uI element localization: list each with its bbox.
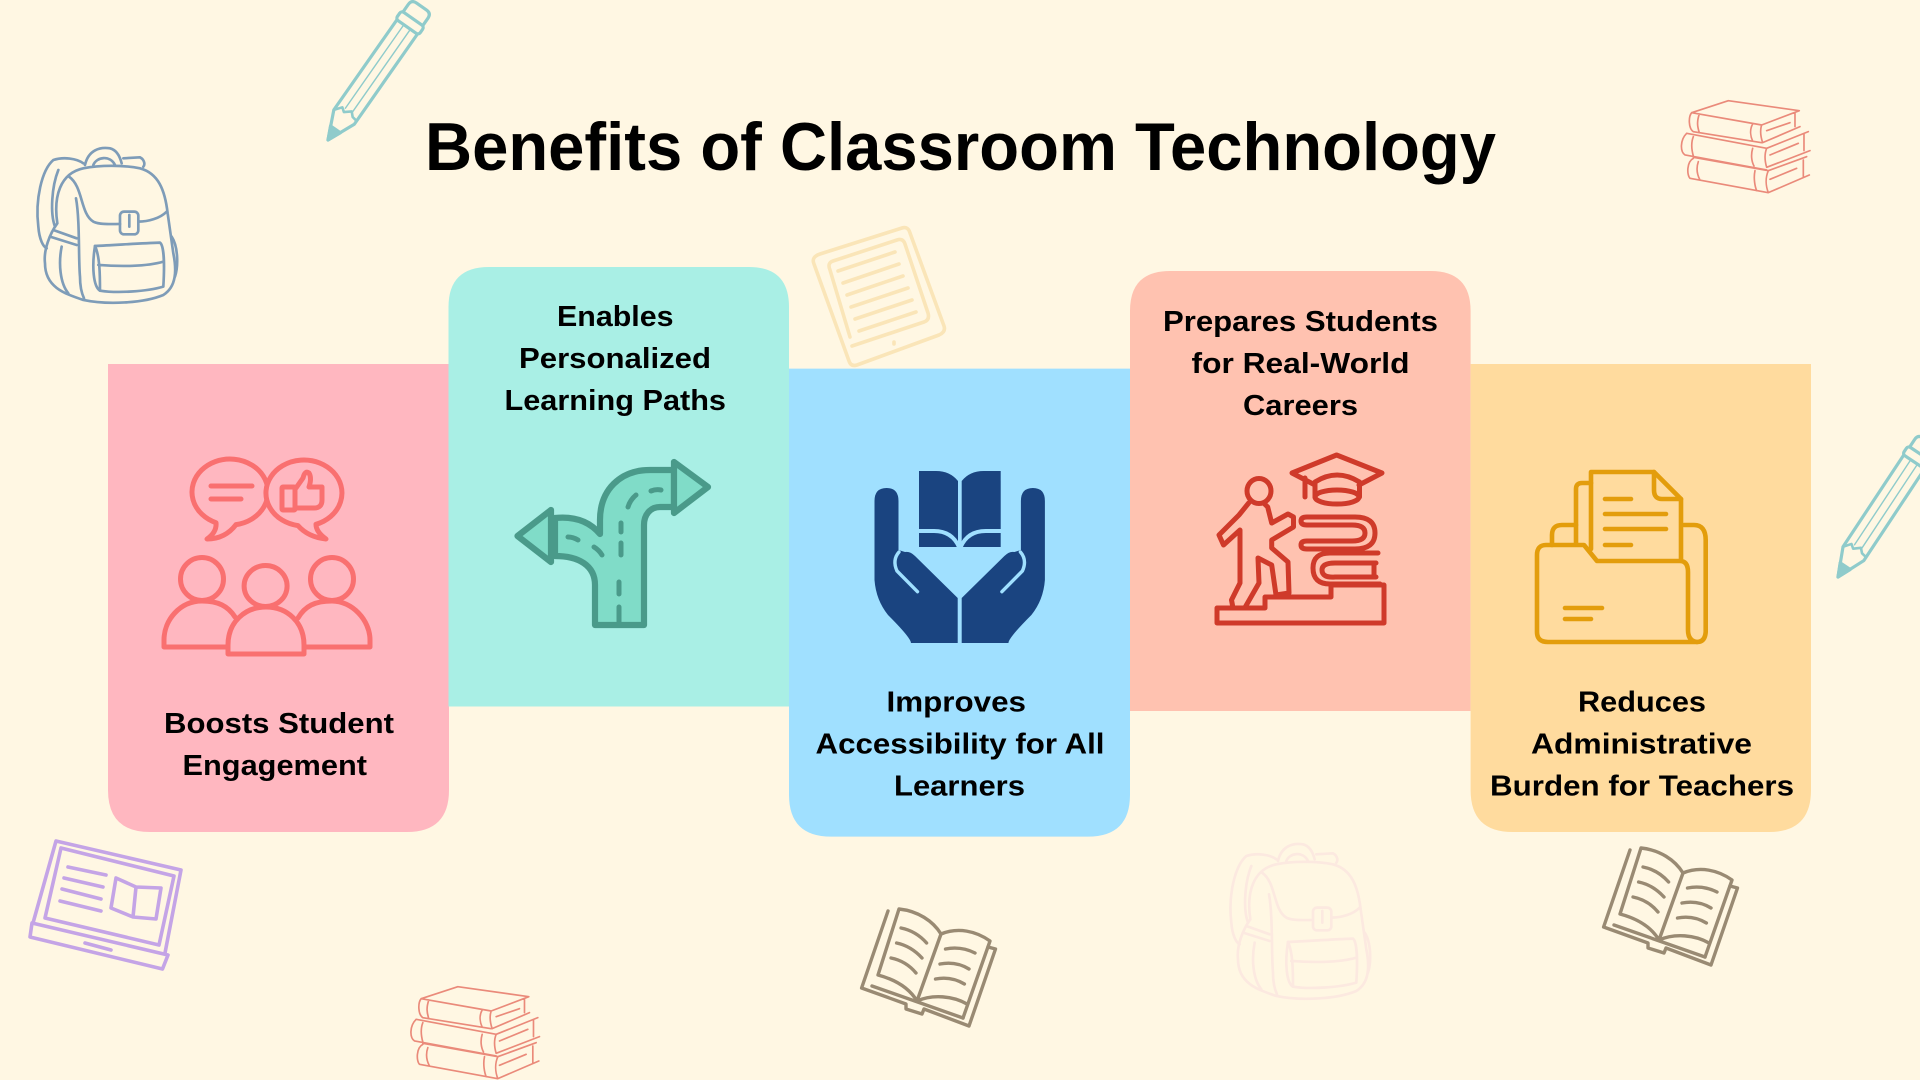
- icon: pencil right: [1826, 433, 1920, 585]
- icon: laptop: [30, 841, 181, 969]
- panel: prepares students for careers: [1130, 271, 1471, 711]
- panel: reduces administrative burden: [1471, 364, 1811, 832]
- label: Engagement: [182, 750, 367, 782]
- icon: open book bottom centre: [862, 909, 996, 1026]
- label: Accessibility for All: [816, 728, 1104, 760]
- panel: accessibility for all learners: [789, 369, 1130, 837]
- label: Enables: [557, 301, 674, 333]
- card: [789, 369, 1130, 837]
- label: Careers: [1243, 390, 1358, 422]
- label: Prepares Students: [1163, 306, 1438, 338]
- icon: discussion group: [164, 459, 370, 654]
- card: [448, 267, 789, 706]
- icon: backpack left: [37, 148, 177, 303]
- card: [108, 364, 449, 832]
- label: Personalized: [519, 343, 711, 375]
- icon: faint notebook: [813, 228, 944, 366]
- icon: stacked books top right: [1681, 101, 1810, 193]
- panel: personalized learning paths: [448, 267, 789, 706]
- icon: forked road: [518, 462, 708, 625]
- label: Learning Paths: [504, 385, 726, 417]
- icon: stacked books bottom: [411, 987, 539, 1079]
- label: for Real-World: [1192, 348, 1410, 380]
- icon: folder with documents: [1537, 472, 1706, 642]
- title: Benefits of Classroom Technology: [425, 109, 1496, 185]
- label: Burden for Teachers: [1490, 770, 1794, 802]
- label: Boosts Student: [164, 708, 394, 740]
- icon: hands holding book: [874, 471, 1045, 643]
- label: Administrative: [1531, 728, 1752, 760]
- icon: open book bottom right: [1604, 848, 1738, 965]
- icon: pencil top: [317, 0, 433, 148]
- icon: faint backpack: [1230, 844, 1370, 999]
- label: Improves: [886, 686, 1026, 718]
- icon: student climbing books to graduation cap: [1217, 455, 1384, 623]
- panel: boosts student engagement: [108, 364, 449, 832]
- label: Reduces: [1578, 686, 1706, 718]
- card: [1130, 271, 1471, 711]
- label: Learners: [894, 770, 1025, 802]
- card: [1471, 364, 1811, 832]
